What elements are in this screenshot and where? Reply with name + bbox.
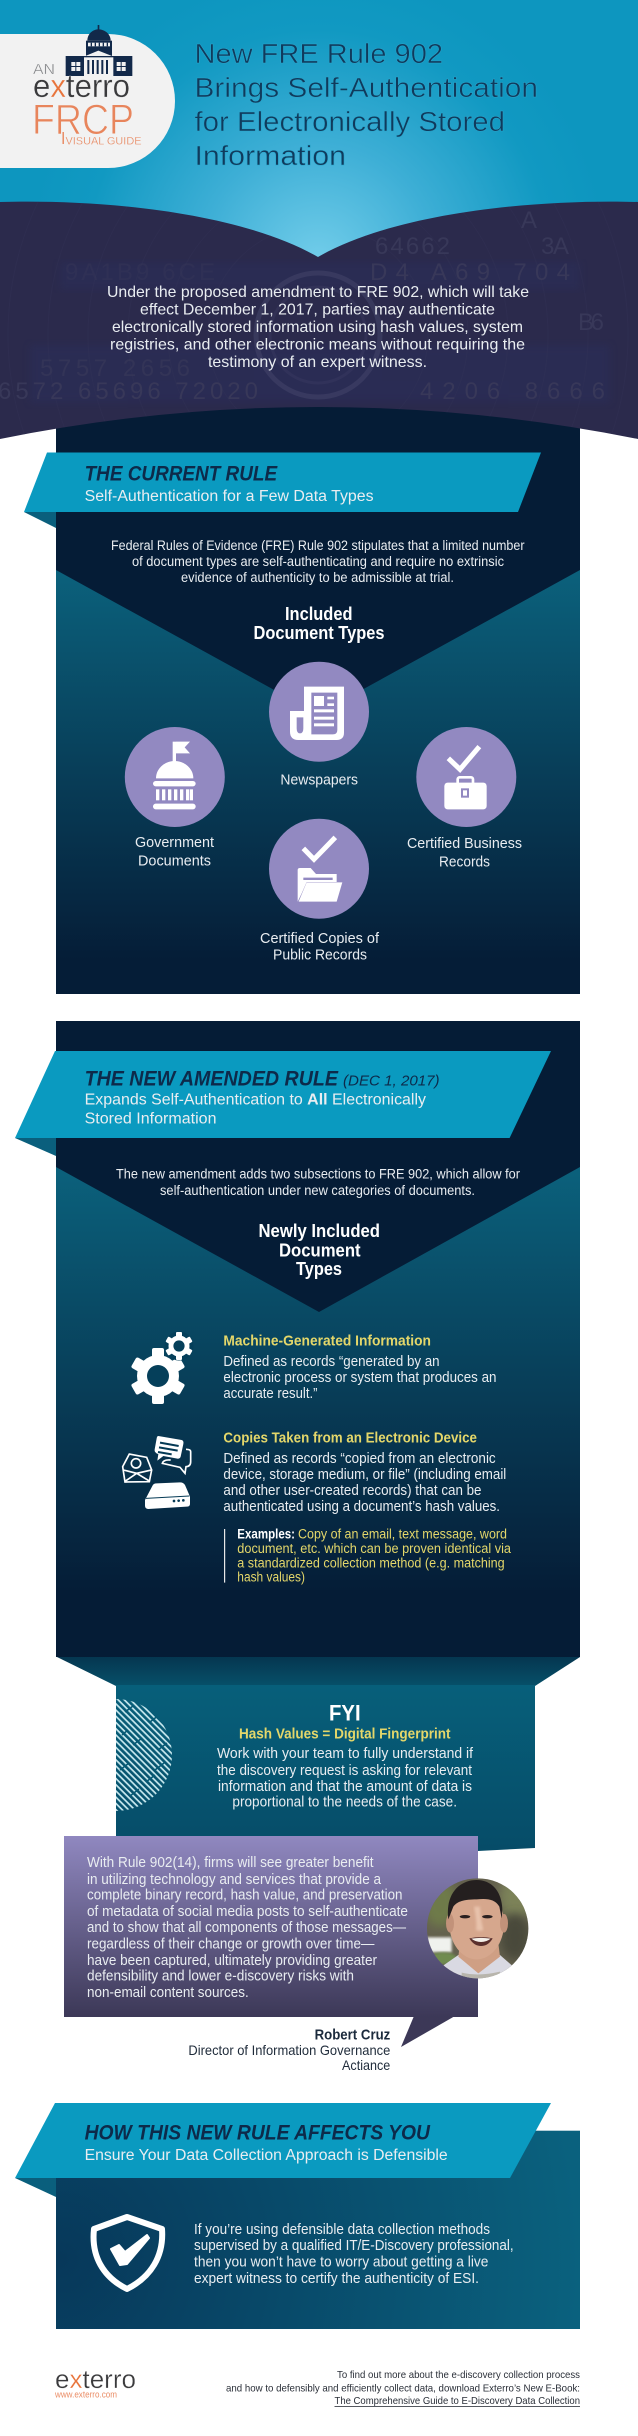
attribution: Robert Cruz bbox=[315, 2026, 390, 2043]
dark digital band: D4 A69 704 bbox=[370, 259, 570, 286]
quote text: have been captured, ultimately providing greater bbox=[87, 1953, 377, 1969]
dark digital band: 4206 8666 bbox=[420, 378, 605, 405]
icon: shield bbox=[94, 2217, 162, 2289]
subheading: hash values: Hash Values = Digital Fingerprint bbox=[239, 1726, 451, 1743]
quote text: defensibility and lower e-discovery risks with bbox=[87, 1969, 354, 1985]
heading: newly included document types bbox=[258, 1221, 380, 1279]
heading: included document types bbox=[254, 604, 384, 643]
heading: newly included document types: Newly Included bbox=[258, 1221, 380, 1241]
callout: examples: Copy of an email, text message, word bbox=[298, 1527, 507, 1542]
text: machine-generated information: Machine-Generated Information bbox=[223, 1332, 431, 1350]
dark digital band bbox=[0, 202, 638, 439]
FYI body text bbox=[217, 1746, 474, 1811]
heading: newly included document types: Types bbox=[296, 1259, 342, 1279]
quote text: of metadata of social media posts to self-authenticate bbox=[87, 1904, 408, 1920]
heading: included document types: Included bbox=[285, 604, 352, 624]
label: government documents: Government bbox=[135, 834, 215, 851]
photo: Robert Cruz bbox=[427, 1878, 528, 1978]
icon: gears bbox=[131, 1332, 194, 1404]
banner: the new amended rule bbox=[15, 1051, 551, 1156]
body text: how this new rule affects you: If you’re using defensible data collection methods bbox=[194, 2222, 490, 2238]
quote text: With Rule 902(14), firms will see greater benefit bbox=[87, 1855, 374, 1871]
heading: the current rule: THE CURRENT RULE bbox=[85, 462, 278, 486]
dark digital band: B6 bbox=[578, 309, 604, 336]
quote text: and to show that all components of those messages— bbox=[87, 1920, 406, 1936]
quote text: non-email content sources. bbox=[87, 1985, 249, 2001]
footer text: and how to defensibly and efficiently collect data, download Exterro’s New E-Book: bbox=[226, 2383, 580, 2395]
subheading: Ensure Your Data Collection Approach is Defensible bbox=[85, 2147, 448, 2164]
dark digital band: 9A1B9 6CE bbox=[65, 259, 215, 286]
heading: newly included document types: Document bbox=[279, 1240, 361, 1260]
text: machine-generated information: electronic process or system that produces an bbox=[223, 1370, 496, 1386]
callout: examples: hash values) bbox=[237, 1569, 305, 1584]
panel 2 base bbox=[56, 1021, 580, 1657]
footer logo: exterro bbox=[55, 2364, 136, 2394]
dark digital band: 5757 2656 bbox=[40, 355, 190, 382]
footer text: The Comprehensive Guide to E-Discovery Data Collection bbox=[334, 2395, 580, 2407]
intro text: testimony of an expert witness. bbox=[208, 354, 427, 371]
heading: included document types: Document Types bbox=[254, 623, 384, 643]
intro text: registries, and other electronic means without requiring the bbox=[110, 336, 525, 354]
title: Information bbox=[194, 140, 346, 171]
footer text: To find out more about the e-discovery collection process bbox=[337, 2369, 580, 2381]
label: certified business records: Records bbox=[439, 854, 490, 871]
label: certified copies bbox=[260, 930, 380, 964]
callout: examples: a standardized collection method (e.g. matching bbox=[237, 1556, 505, 1571]
label: newspapers: Newspapers bbox=[280, 772, 358, 788]
dark digital band: 6572 65696 72020 bbox=[0, 378, 258, 405]
text: copies taken from an electronic device: and other user-created records) that can be bbox=[223, 1483, 482, 1499]
label: certified business records: Certified Business bbox=[407, 835, 522, 852]
text: machine-generated information bbox=[223, 1332, 496, 1402]
text: copies taken from an electronic device: device, storage medium, or file” (including email bbox=[223, 1467, 506, 1483]
logo text: FRCP: FRCP bbox=[32, 96, 134, 144]
subheading: Self-Authentication for a Few Data Types bbox=[85, 488, 374, 505]
text: copies taken from an electronic device bbox=[223, 1430, 506, 1515]
quote text bbox=[87, 1855, 408, 2001]
current rule paragraph: of document types are self-authenticating and require no extrinsic bbox=[132, 554, 504, 569]
label: government documents: Documents bbox=[138, 853, 211, 870]
text: copies taken from an electronic device: Copies Taken from an Electronic Device bbox=[223, 1430, 477, 1447]
intro text bbox=[107, 284, 529, 371]
callout: examples: Examples: bbox=[237, 1527, 295, 1542]
text: copies taken from an electronic device: Defined as records “copied from an electronic bbox=[223, 1451, 496, 1467]
dark digital band: 3A bbox=[541, 233, 569, 260]
FYI body text: information and that the amount of data is bbox=[218, 1779, 472, 1795]
quote text: complete binary record, hash value, and preservation bbox=[87, 1888, 402, 1904]
subheading bbox=[85, 1092, 426, 1128]
dark digital band: A bbox=[521, 207, 537, 234]
heading: HOW THIS NEW RULE AFFECTS YOU bbox=[85, 2121, 431, 2144]
callout: examples: document, etc. which can be proven identical via bbox=[237, 1541, 511, 1556]
icon: government documents bbox=[125, 727, 225, 827]
header sky background bbox=[0, 0, 638, 300]
panel 1 base bbox=[56, 400, 580, 994]
text: machine-generated information: Defined as records “generated by an bbox=[223, 1354, 440, 1370]
intro text: electronically stored information using hash values, system bbox=[112, 319, 523, 336]
attribution bbox=[188, 2026, 390, 2073]
icon: capitol building bbox=[66, 25, 132, 76]
body text: how this new rule affects you: expert witness to certify the authenticity of ESI. bbox=[194, 2271, 479, 2287]
quote text: in utilizing technology and services that provide a bbox=[87, 1872, 382, 1888]
heading: the new amended rule: THE NEW AMENDED RULE bbox=[85, 1068, 339, 1090]
title: Brings Self-Authentication bbox=[194, 72, 538, 103]
current rule paragraph: evidence of authenticity to be admissible at trial. bbox=[181, 570, 454, 585]
title: New FRE Rule 902 bbox=[194, 38, 443, 69]
icon: email, messages and server bbox=[123, 1436, 191, 1509]
attribution: Actiance bbox=[342, 2057, 390, 2073]
label: certified copies: Public Records bbox=[273, 947, 367, 964]
panel: FYI bbox=[57, 1657, 580, 1851]
attribution: Director of Information Governance bbox=[188, 2042, 390, 2058]
amended rule paragraph: self-authentication under new categories of documents. bbox=[160, 1183, 475, 1198]
FYI body text: the discovery request is asking for relevant bbox=[217, 1763, 472, 1779]
subheading: Stored Information bbox=[85, 1110, 216, 1128]
logo text: AN: AN bbox=[33, 61, 55, 78]
heading date: (DEC 1, 2017) bbox=[343, 1074, 440, 1090]
label: government documents bbox=[135, 834, 215, 870]
body text: how this new rule affects you: supervised by a qualified IT/E-Discovery professional, bbox=[194, 2238, 514, 2254]
amended rule paragraph bbox=[116, 1167, 520, 1198]
dark digital band: 64662 bbox=[375, 233, 450, 260]
label: certified copies: Certified Copies of bbox=[260, 930, 380, 947]
banner: how this new rule affects you bbox=[15, 2103, 551, 2197]
text: machine-generated information: accurate result.” bbox=[223, 1386, 318, 1402]
heading: FYI: FYI bbox=[329, 1701, 361, 1726]
logo stem bbox=[62, 132, 64, 144]
amended rule paragraph: The new amendment adds two subsections to FRE 902, which allow for bbox=[116, 1167, 520, 1182]
FYI body text: proportional to the needs of the case. bbox=[232, 1795, 457, 1811]
text: copies taken from an electronic device: authenticated using a document’s hash values. bbox=[223, 1499, 500, 1515]
title bbox=[194, 38, 538, 171]
callout: examples bbox=[224, 1527, 511, 1584]
footer logo: www.exterro.com bbox=[54, 2390, 117, 2401]
speech bubble tail bbox=[401, 2016, 455, 2047]
banner: the current rule bbox=[24, 452, 541, 528]
icon: newspapers bbox=[269, 662, 369, 762]
intro text: Under the proposed amendment to FRE 902, which will take bbox=[107, 284, 529, 301]
quote text: regardless of their change or growth over time— bbox=[87, 1937, 375, 1953]
intro text: effect December 1, 2017, parties may authenticate bbox=[140, 302, 495, 318]
FYI body text: Work with your team to fully understand if bbox=[217, 1746, 474, 1762]
icon: certified copies bbox=[269, 819, 369, 919]
icon: certified business records bbox=[416, 727, 516, 827]
footer text bbox=[226, 2369, 580, 2407]
body text: how this new rule affects you bbox=[194, 2222, 514, 2287]
panel: how this new rule affects you bbox=[56, 2131, 580, 2329]
quote panel bbox=[64, 1836, 478, 2047]
logo pill bbox=[0, 25, 175, 168]
title: for Electronically Stored bbox=[194, 106, 505, 137]
subheading: Expands Self-Authentication to All Electronically bbox=[85, 1092, 426, 1109]
current rule paragraph bbox=[111, 538, 525, 585]
label: certified business records bbox=[407, 835, 522, 871]
body text: how this new rule affects you: then you won’t have to worry about getting a live bbox=[194, 2255, 488, 2271]
current rule paragraph: Federal Rules of Evidence (FRE) Rule 902 stipulates that a limited number bbox=[111, 538, 525, 553]
logo text: exterro: exterro bbox=[33, 68, 130, 104]
logo text: visual guide: VISUAL GUIDE bbox=[66, 136, 142, 148]
fingerprint graphic bbox=[116, 1699, 172, 1811]
